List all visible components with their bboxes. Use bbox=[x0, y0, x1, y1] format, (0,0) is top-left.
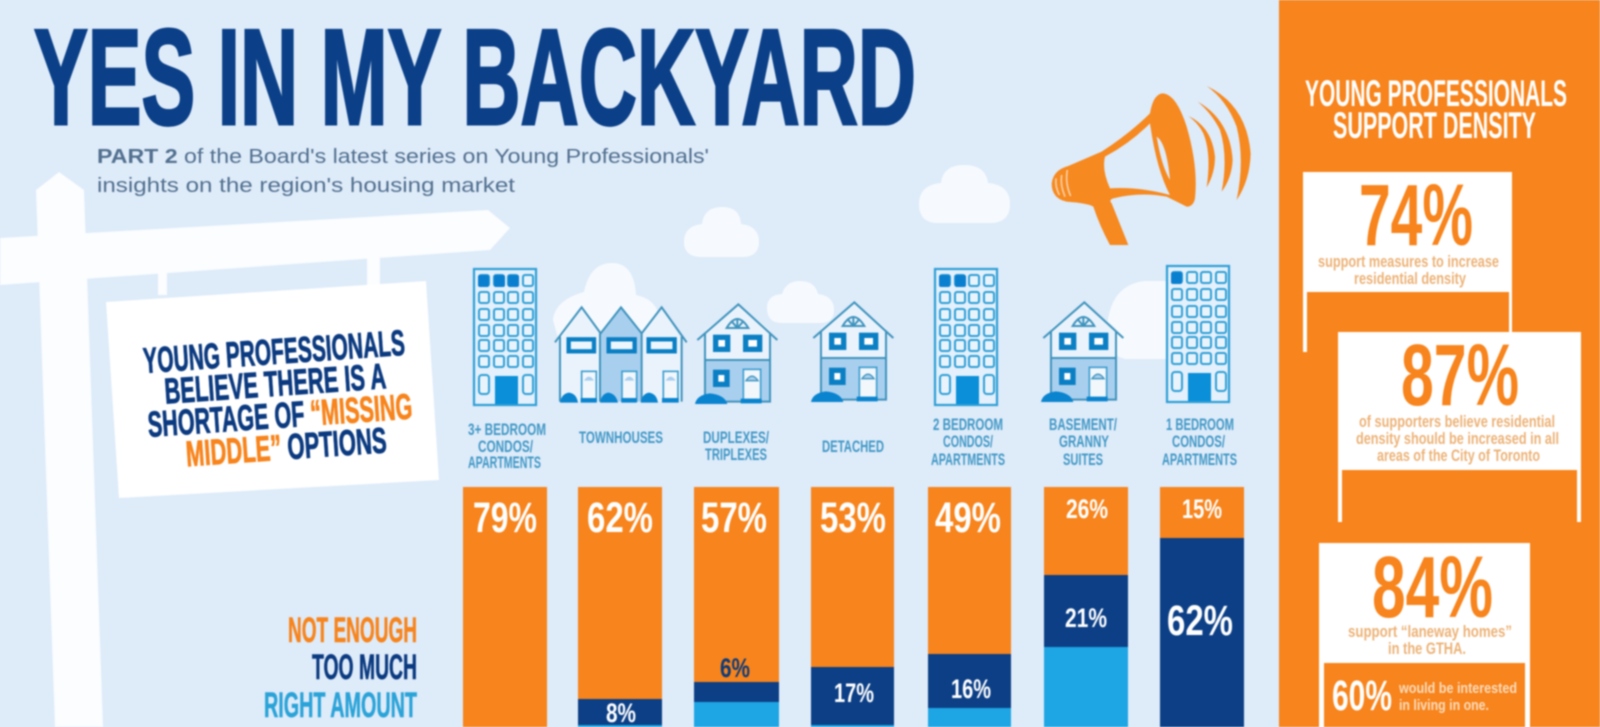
bar: duplexes: 57% bbox=[701, 494, 767, 542]
title: YES IN MY BACKYARD bbox=[34, 1, 916, 153]
category labels: CONDOS/ bbox=[943, 433, 993, 451]
card: 74%: 74% bbox=[1359, 167, 1473, 264]
cloud top centre-right bbox=[919, 165, 1010, 223]
card: 84%: in the GTHA. bbox=[1388, 640, 1466, 658]
category labels: GRANNY bbox=[1059, 433, 1109, 451]
subtitle: PART 2 of the Board's latest series on Young Professionals' bbox=[97, 146, 709, 168]
sign board with message: SHORTAGE OF “MISSING bbox=[146, 386, 414, 445]
card: 74% bbox=[1303, 167, 1512, 352]
category labels: APARTMENTS bbox=[931, 451, 1005, 469]
icon: 1 bedroom building bbox=[1167, 266, 1229, 402]
cloud top centre-left bbox=[684, 207, 759, 257]
bar: 2 bedroom condos: 16% bbox=[951, 674, 991, 704]
category labels bbox=[468, 416, 1237, 472]
category labels: CONDOS/ bbox=[1172, 433, 1225, 451]
bar: 1 bedroom condos: 15% bbox=[1182, 494, 1222, 524]
icon: townhouses bbox=[555, 307, 687, 403]
card: 74%: support measures to increase bbox=[1318, 253, 1499, 271]
bar: 3+ bedroom condos bbox=[463, 487, 547, 727]
bar: townhouses: 62% bbox=[587, 494, 653, 542]
category labels: TOWNHOUSES bbox=[579, 429, 663, 447]
category labels: DETACHED bbox=[822, 438, 884, 456]
stacked bar chart bbox=[463, 487, 1244, 727]
card: 87%: 87% bbox=[1401, 327, 1519, 424]
bar: duplexes: 6% bbox=[720, 653, 750, 683]
bar: 1 bedroom condos bbox=[1160, 487, 1244, 727]
legend: TOO MUCH bbox=[312, 648, 417, 687]
card: 84%: in living in one. bbox=[1399, 697, 1489, 714]
card: 87% bbox=[1338, 327, 1581, 522]
bar: detached: 53% bbox=[820, 494, 886, 542]
bar: duplexes bbox=[694, 487, 779, 727]
bar: 2 bedroom condos bbox=[928, 487, 1011, 727]
icon: 3+ bedroom building bbox=[474, 269, 536, 405]
bar: 3+ bedroom condos: 79% bbox=[473, 494, 537, 542]
category labels: TRIPLEXES bbox=[705, 446, 767, 464]
panel heading bbox=[1305, 73, 1567, 146]
category labels: 3+ BEDROOM bbox=[468, 421, 546, 439]
cloud behind townhouses bbox=[553, 263, 660, 345]
card: 84% bbox=[1319, 539, 1530, 727]
bar: 2 bedroom condos: 49% bbox=[935, 494, 1001, 542]
bar: townhouses bbox=[578, 487, 662, 727]
icon: 2 bedroom building bbox=[935, 269, 997, 405]
category labels: SUITES bbox=[1063, 451, 1103, 469]
sign board with message: YOUNG PROFESSIONALS bbox=[142, 322, 406, 381]
card: 84%: would be interested bbox=[1398, 680, 1517, 697]
sign board with message: BELIEVE THERE IS A bbox=[163, 355, 387, 412]
sign board with message bbox=[106, 281, 439, 498]
card: 84%: support “laneway homes” bbox=[1348, 623, 1512, 641]
legend bbox=[264, 611, 417, 725]
sign board with message: MIDDLE” OPTIONS bbox=[184, 419, 388, 474]
card: 74%: residential density bbox=[1354, 270, 1467, 288]
category labels: 1 BEDROOM bbox=[1166, 416, 1234, 434]
bar: basement suites: 21% bbox=[1065, 603, 1107, 633]
card: 87%: areas of the City of Toronto bbox=[1377, 447, 1540, 465]
card: 84%: 60% bbox=[1332, 672, 1392, 720]
bar: detached: 17% bbox=[834, 678, 874, 708]
legend: RIGHT AMOUNT bbox=[264, 686, 417, 725]
card: 84%: 84% bbox=[1372, 539, 1493, 636]
bar: basement suites bbox=[1044, 487, 1128, 727]
category labels: BASEMENT/ bbox=[1049, 416, 1117, 434]
panel: young professionals support density bbox=[1279, 0, 1600, 727]
category labels: DUPLEXES/ bbox=[703, 429, 769, 447]
bar: 1 bedroom condos: 62% bbox=[1167, 597, 1233, 645]
cloud behind detached house bbox=[767, 281, 834, 323]
subtitle: insights on the region's housing market bbox=[97, 175, 516, 197]
icon: megaphone bbox=[1052, 86, 1251, 245]
signpost bbox=[0, 172, 510, 727]
category labels: APARTMENTS bbox=[468, 454, 541, 472]
legend: NOT ENOUGH bbox=[288, 611, 417, 650]
bar: detached bbox=[811, 487, 894, 727]
icon: basement suite house bbox=[1041, 302, 1123, 402]
icon: duplex bbox=[695, 304, 777, 404]
icon: detached house bbox=[811, 302, 893, 402]
bar: basement suites: 26% bbox=[1066, 494, 1108, 524]
subtitle bbox=[97, 146, 709, 197]
category labels: APARTMENTS bbox=[1162, 451, 1237, 469]
category labels: 2 BEDROOM bbox=[933, 416, 1003, 434]
category labels: CONDOS/ bbox=[478, 438, 533, 456]
cloud behind basement suite bbox=[1107, 281, 1170, 359]
